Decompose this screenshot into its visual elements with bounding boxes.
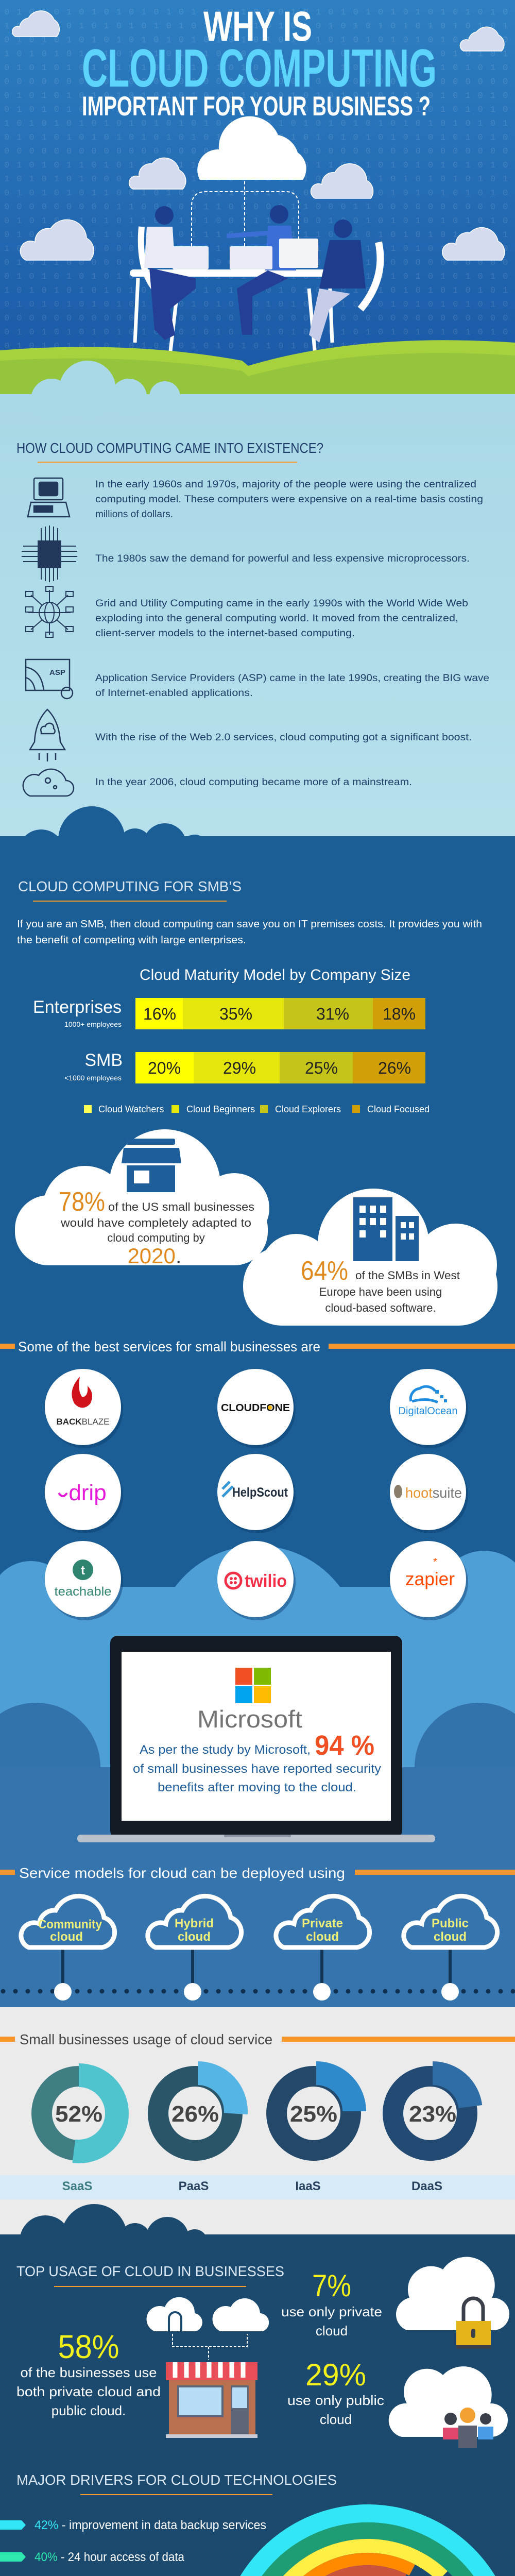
stat: 7% private only: cloud xyxy=(316,2323,348,2338)
hero background: 01010101010101010101010101010101010101010 xyxy=(4,272,515,282)
stat: 7% private only xyxy=(281,2268,382,2338)
cloud: private: Private xyxy=(302,1917,343,1930)
timeline items xyxy=(22,478,489,796)
legend: Cloud Focused xyxy=(367,1104,430,1114)
icon: microprocessor xyxy=(22,526,77,582)
logo: drip xyxy=(45,1454,121,1530)
hero background: 01010101010101010101010101010101010101010 xyxy=(4,300,515,310)
logo: teachable: t xyxy=(81,1564,85,1578)
text: 1990s grid: exploding into the general computing world. It moved from the centralized, xyxy=(95,613,458,624)
hero background: 00000000000000000000000000000000000000000 xyxy=(4,147,515,157)
donut chart: DaaS: DaaS xyxy=(411,2179,442,2193)
logo: CloudFone xyxy=(217,1369,294,1445)
hero background: 10101010101010101010101010101010101010101 xyxy=(4,49,515,59)
hero background: 01010110101100110110110101101101010101010 xyxy=(4,161,515,171)
hero background: 10101010101010101010101010101010101010101 xyxy=(4,119,515,129)
donut chart: SaaS: 52% xyxy=(55,2102,102,2127)
stat: 29% public only xyxy=(287,2358,384,2427)
hero background: 01010101010101010101010101010101010101010 xyxy=(4,133,515,143)
laptop: Microsoft stat: Microsoft xyxy=(197,1705,302,1733)
text: 1990s grid: client-server models to the internet-based computing. xyxy=(95,628,355,639)
heading: top usage of cloud: TOP USAGE OF CLOUD IN BUSINESSES xyxy=(16,2263,284,2279)
row: enterprises: 31% xyxy=(316,1005,349,1023)
hero background: 01010101100101010110010101010101010101010 xyxy=(4,189,515,198)
text: 1990s grid xyxy=(95,598,468,639)
heading: service models: Service models for cloud can be deployed using xyxy=(19,1865,345,1881)
cloud: hybrid: Hybrid xyxy=(175,1917,214,1930)
donut chart: IaaS: 25% xyxy=(290,2102,337,2127)
logo: zapier: * xyxy=(433,1556,437,1568)
logo grid xyxy=(45,1369,468,1620)
section background: SMB xyxy=(0,806,515,1588)
hero background: 10101010001001011001101010101010101010101 xyxy=(4,175,515,184)
service model timeline xyxy=(1,1950,515,2001)
hero background: 01010101010101010101010101010101010101010 xyxy=(4,91,515,101)
callout: 64% West Europe SMBs: Europe have been using xyxy=(319,1285,442,1298)
title: WHY IS xyxy=(203,3,312,50)
legend: Cloud Beginners xyxy=(186,1104,255,1114)
row: SMB: 25% xyxy=(305,1059,338,1077)
logo: teachable: teachable xyxy=(55,1585,111,1599)
icon: store xyxy=(166,2362,258,2438)
laptop: Microsoft stat: benefits after moving to the cloud. xyxy=(158,1781,356,1794)
hero background: 10101010101010101010101010101010101010101 xyxy=(4,22,515,31)
legend: drivers list: 42% - improvement in data backup services xyxy=(35,2518,266,2532)
text: 1960s: computing model. These computers were expensive on a real-time basis costing xyxy=(95,494,483,505)
stat: 58% both clouds: 58% xyxy=(58,2328,119,2365)
cloud: public xyxy=(404,1896,497,1947)
row: SMB: 26% xyxy=(378,1059,411,1077)
text: 1960s xyxy=(95,479,483,520)
row: enterprises: 18% xyxy=(383,1005,416,1023)
logo: hootsuite: hootsuite xyxy=(405,1485,462,1501)
callout: 78% US small businesses: 78% xyxy=(59,1187,105,1217)
stat: 29% public only: use only public xyxy=(287,2393,384,2408)
row: enterprises: Enterprises xyxy=(33,997,122,1017)
stat: 7% private only: use only private xyxy=(281,2304,382,2319)
logo: twilio xyxy=(217,1541,294,1617)
background: light blue clouds behind logos/laptop xyxy=(0,1546,515,2009)
legend: drivers list: 40% - 24 hour access of data xyxy=(35,2550,185,2564)
stat: 7% private only: 7% xyxy=(312,2268,351,2303)
laptop: Microsoft stat xyxy=(77,1636,435,1842)
chart: rainbow arcs xyxy=(228,2513,489,2576)
heading: small business usage: Small businesses usage of cloud service xyxy=(20,2031,272,2047)
legend: drivers list xyxy=(0,2518,266,2576)
icon: cloud with gears xyxy=(23,769,74,796)
hero background: 01010101010101010101010101010101010101010 xyxy=(4,36,515,45)
icon: office buildings xyxy=(353,1197,419,1261)
stat: 58% both clouds: of the businesses use xyxy=(21,2365,157,2380)
row: SMB xyxy=(64,1050,425,1083)
logo: DigitalOcean xyxy=(390,1369,466,1445)
donut chart: PaaS: 26% xyxy=(171,2102,219,2127)
stat: 58% both clouds xyxy=(16,2328,161,2418)
icon: Microsoft logo xyxy=(235,1668,271,1703)
logo: Backblaze: BACKBLAZE xyxy=(57,1417,109,1427)
SMB intro paragraph: the benefit of competing with large enterprises. xyxy=(17,935,246,946)
text: 2006: In the year 2006, cloud computing became more of a mainstream. xyxy=(95,777,412,788)
title xyxy=(82,3,437,122)
hero background: 01010101010101010101010101010101010101010 xyxy=(4,342,515,351)
icon: rocket xyxy=(30,709,65,761)
row: enterprises: 16% xyxy=(143,1005,176,1023)
hero: central cloud with connection lines xyxy=(192,116,306,247)
heading: major drivers: MAJOR DRIVERS FOR CLOUD TECHNOLOGIES xyxy=(16,2472,337,2488)
donut chart: DaaS: 23% xyxy=(409,2102,456,2127)
callout: 64% West Europe SMBs: cloud-based software. xyxy=(325,1301,436,1314)
text: 1960s: In the early 1960s and 1970s, majority of the people were using the centralized xyxy=(95,479,476,490)
hero background: 10101010000010000100010001010101010101010 xyxy=(4,244,515,254)
text: ASP: of Internet-enabled applications. xyxy=(95,688,253,699)
text: 1980s: The 1980s saw the demand for powerful and less expensive microprocessors. xyxy=(95,553,470,564)
text: 1960s: millions of dollars. xyxy=(95,509,173,520)
logo: Backblaze xyxy=(45,1369,121,1445)
legend xyxy=(84,1104,430,1114)
text: 1990s grid: Grid and Utility Computing came in the early 1990s with the World Wide Web xyxy=(95,598,468,609)
cloud: private: cloud xyxy=(306,1930,339,1944)
row: SMB: SMB xyxy=(84,1050,123,1070)
hero background: 00000000011000001100000110001100000000000 xyxy=(4,202,515,212)
icon: hybrid cloud to store xyxy=(147,2297,269,2438)
donut chart: SaaS: SaaS xyxy=(62,2179,92,2193)
heading: service models xyxy=(0,1865,515,1881)
green hills xyxy=(0,340,515,412)
logo: twilio: twilio xyxy=(245,1571,287,1591)
callout: 78% US small businesses xyxy=(15,1129,269,1268)
icon: network globe xyxy=(26,586,73,637)
logo: DigitalOcean: DigitalOcean xyxy=(399,1405,457,1417)
callout: 78% US small businesses: of the US small businesses xyxy=(108,1200,254,1213)
logo: CloudFone: CLOUDFONE xyxy=(221,1402,290,1414)
SMB intro paragraph xyxy=(17,919,482,946)
cloud: community: cloud xyxy=(50,1930,83,1944)
row: SMB: <1000 employees xyxy=(64,1074,122,1082)
row: enterprises: 35% xyxy=(219,1005,252,1023)
cloud: community: Community xyxy=(38,1918,102,1931)
heading: cloud computing for SMBs: CLOUD COMPUTING FOR SMB’S xyxy=(18,878,242,894)
laptop: Microsoft stat: 94 % xyxy=(315,1730,374,1761)
text: ASP xyxy=(95,673,489,699)
logo: Help Scout: HelpScout xyxy=(232,1485,288,1500)
hero background: 01011000000000000000000000000110000000000 xyxy=(4,258,515,268)
cloud: public: cloud xyxy=(434,1930,467,1944)
donut chart: DaaS xyxy=(393,2073,471,2193)
cloud: private xyxy=(276,1896,370,1947)
text: Web 2.0: With the rise of the Web 2.0 services, cloud computing got a significant boost. xyxy=(95,732,472,743)
legend: Cloud Watchers xyxy=(98,1104,164,1114)
callout: 64% West Europe SMBs: of the SMBs in West xyxy=(355,1269,460,1282)
icon: ASP: ASP xyxy=(49,668,65,677)
heading: small business usage xyxy=(0,2031,515,2047)
callout: 78% US small businesses: would have completely adapted to xyxy=(60,1216,251,1229)
heading: best services xyxy=(0,1339,515,1354)
donut chart: PaaS: PaaS xyxy=(179,2179,209,2193)
donut chart: IaaS xyxy=(277,2073,354,2193)
stat: 29% public only: 29% xyxy=(305,2358,366,2392)
heading: best services: Some of the best services for small businesses are xyxy=(18,1339,320,1354)
cloud: public: Public xyxy=(432,1917,469,1930)
donut chart: PaaS xyxy=(158,2073,236,2193)
callout: 64% West Europe SMBs xyxy=(243,1189,497,1326)
hero background: 10101010101010101010101010101010101010101 xyxy=(4,286,515,296)
hero background: 01010110101100101001110100100101010101010 xyxy=(4,216,515,226)
laptop: Microsoft stat: of small businesses have reported security xyxy=(133,1762,381,1776)
laptop: Microsoft stat: As per the study by Microsoft, xyxy=(140,1743,311,1757)
hero background: 00000000000000000000000000000000000000000 xyxy=(4,314,515,324)
heading: how cloud computing came into existence: HOW CLOUD COMPUTING CAME INTO EXISTENCE? xyxy=(16,440,323,456)
SMB intro paragraph: If you are an SMB, then cloud computing can save you on IT premises costs. It provides you with xyxy=(17,919,482,930)
logo: zapier xyxy=(390,1541,466,1617)
cloud: community xyxy=(21,1896,115,1947)
donut chart: IaaS: IaaS xyxy=(295,2179,321,2193)
logo: teachable xyxy=(45,1541,121,1617)
logo: zapier: zapier xyxy=(405,1568,455,1589)
hero background: 01010101010101010101010101010101010101010 xyxy=(4,63,515,73)
chart: cloud maturity model xyxy=(33,967,430,1114)
callout: 78% US small businesses: 2020. xyxy=(127,1244,182,1268)
icon: cloud with padlock xyxy=(396,2257,509,2349)
row: enterprises: 1000+ employees xyxy=(64,1020,122,1028)
section background: usage xyxy=(0,2007,515,2236)
cloud: hybrid: cloud xyxy=(178,1930,211,1944)
section background: top usage & drivers xyxy=(0,2204,515,2576)
hero background: 00000000000000000000000000000000000000000 xyxy=(4,77,515,87)
icon: mainframe computer xyxy=(28,478,70,517)
text: ASP: Application Service Providers (ASP) came in the late 1990s, creating the BIG wave xyxy=(95,673,489,684)
donut chart: SaaS xyxy=(41,2075,117,2193)
hero background xyxy=(0,0,515,402)
row: enterprises xyxy=(33,997,425,1029)
legend: Cloud Explorers xyxy=(275,1104,341,1114)
row: SMB: 20% xyxy=(148,1059,181,1077)
icon: store xyxy=(122,1139,181,1192)
hero clouds xyxy=(12,11,505,260)
stat: 58% both clouds: public cloud. xyxy=(52,2403,126,2418)
cloud: hybrid xyxy=(148,1896,242,1947)
stat: 29% public only: cloud xyxy=(320,2412,352,2427)
section background: history xyxy=(0,361,515,837)
icon: ASP xyxy=(26,659,73,699)
chart: cloud maturity model: Cloud Maturity Model by Company Size xyxy=(140,967,410,984)
hero background: 01010101010101010101010101010101010101010 xyxy=(4,8,515,18)
hero background: 01010101010101010101010101010101010101010 xyxy=(4,328,515,337)
logo: Help Scout xyxy=(217,1454,294,1530)
logo: hootsuite xyxy=(390,1454,466,1530)
hero: people at table xyxy=(130,205,380,355)
row: SMB: 29% xyxy=(223,1059,256,1077)
hero background: 01010101010101010101010101010101010101010 xyxy=(4,105,515,115)
callout: 78% US small businesses: cloud computing by xyxy=(107,1231,205,1244)
stat: 58% both clouds: both private cloud and xyxy=(16,2384,161,2399)
callout: 64% West Europe SMBs: 64% xyxy=(301,1256,348,1286)
logo: drip: drip xyxy=(68,1480,107,1505)
hero background: 01010101101111011101110111011010101010101 xyxy=(4,230,515,240)
icon: cloud with people xyxy=(389,2366,508,2448)
